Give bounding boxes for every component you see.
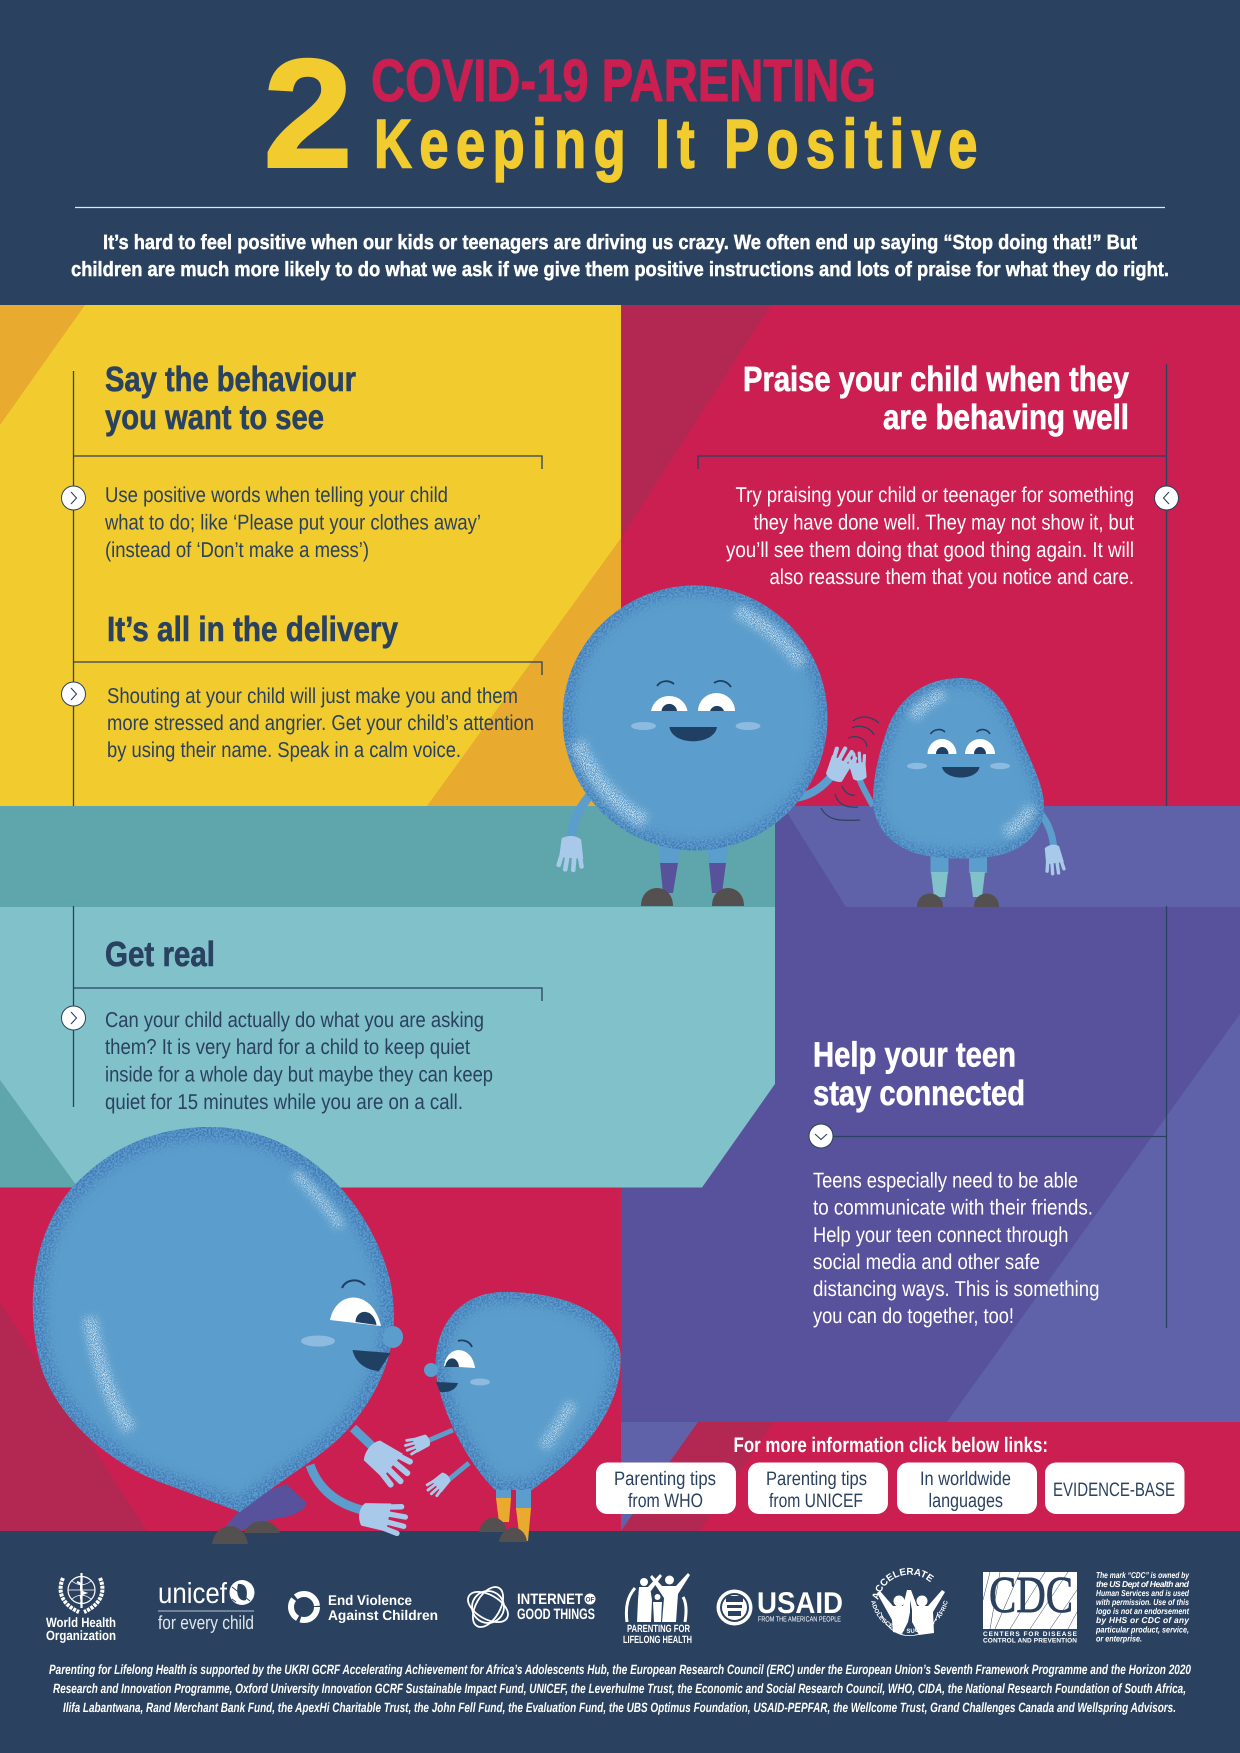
panel: all in the delivery: Shouting at your child will just make you and them bbox=[107, 684, 518, 708]
panel: help your teen bbox=[809, 906, 1166, 1328]
panel: praise your child: Praise your child when they bbox=[743, 360, 1129, 399]
panel: all in the delivery: It’s all in the delivery bbox=[107, 610, 398, 649]
icon: chevron right bbox=[62, 1006, 86, 1030]
CDC disclaimer bbox=[1095, 1570, 1190, 1644]
title: 2 bbox=[263, 27, 353, 200]
icon: chevron right bbox=[62, 682, 86, 706]
panel: say the behaviour: (instead of ‘Don’t make a mess’) bbox=[105, 538, 369, 562]
panel: say the behaviour: what to do; like ‘Please put your clothes away’ bbox=[104, 510, 481, 534]
panel: help your teen: to communicate with their friends. bbox=[813, 1196, 1093, 1220]
CDC disclaimer: with permission. Use of this bbox=[1096, 1597, 1189, 1607]
CDC disclaimer: the US Dept of Health and bbox=[1096, 1579, 1190, 1589]
panel: help your teen: you can do together, too! bbox=[813, 1304, 1014, 1328]
logo: CDC: CONTROL AND PREVENTION bbox=[983, 1638, 1077, 1644]
logo: Accelerate bbox=[871, 1568, 948, 1636]
logo: Parenting for Lifelong Health: PARENTING FOR bbox=[627, 1623, 690, 1635]
icon: chevron left bbox=[1154, 486, 1178, 510]
logo: Accelerate: ADOLESCENT • SUCCESS • AFRICA bbox=[871, 1600, 948, 1633]
panel: praise your child: Try praising your child or teenager for something bbox=[736, 483, 1134, 507]
illustration: big character high five bbox=[558, 586, 857, 906]
illustration: big character bending bbox=[33, 1127, 415, 1544]
panel: say the behaviour: Say the behaviour bbox=[105, 360, 356, 399]
button: WHO tips: from WHO bbox=[628, 1490, 703, 1512]
icon: chevron right bbox=[62, 486, 86, 510]
more information links bbox=[596, 1434, 1184, 1514]
logo: USAID bbox=[716, 1587, 843, 1626]
CDC disclaimer: The mark “CDC” is owned by bbox=[1096, 1570, 1190, 1580]
logo: Internet of Good Things: OF bbox=[586, 1596, 595, 1604]
panel: help your teen: stay connected bbox=[813, 1074, 1025, 1113]
logo: Parenting for Lifelong Health: LIFELONG HEALTH bbox=[623, 1634, 692, 1646]
panel: praise your child: also reassure them that you notice and care. bbox=[770, 565, 1134, 589]
CDC disclaimer: by HHS or CDC of any bbox=[1096, 1615, 1190, 1625]
panel: say the behaviour: you want to see bbox=[105, 398, 324, 437]
logo: CDC: CENTERS FOR DISEASE bbox=[983, 1631, 1078, 1638]
funding statement bbox=[49, 1662, 1191, 1715]
button: worldwide languages: languages bbox=[928, 1490, 1003, 1512]
logo: World Health Organization bbox=[46, 1573, 116, 1643]
CDC disclaimer: particular product, service, bbox=[1095, 1624, 1189, 1634]
logo: Parenting for Lifelong Health bbox=[623, 1573, 692, 1646]
logo: unicef bbox=[158, 1578, 254, 1634]
panel: get real: Get real bbox=[105, 935, 215, 974]
panel: get real: Can your child actually do what you are asking bbox=[105, 1008, 484, 1032]
panel: praise your child: you’ll see them doing that good thing again. It will bbox=[726, 538, 1134, 562]
button: UNICEF tips bbox=[748, 1462, 888, 1514]
panel: all in the delivery bbox=[62, 610, 542, 762]
panel: all in the delivery: by using their name. Speak in a calm voice. bbox=[107, 738, 461, 762]
CDC disclaimer: logo is not an endorsement bbox=[1096, 1606, 1190, 1616]
panel: get real bbox=[62, 906, 542, 1114]
panel: praise your child: they have done well. They may not show it, but bbox=[754, 510, 1134, 534]
panel: help your teen: distancing ways. This is something bbox=[813, 1277, 1100, 1301]
logo: World Health Organization: Organization bbox=[46, 1628, 116, 1643]
logo: Internet of Good Things: INTERNET bbox=[517, 1591, 583, 1608]
logo: CDC: CDC bbox=[989, 1567, 1073, 1624]
panel: help your teen: social media and other safe bbox=[813, 1250, 1040, 1274]
logo: Accelerate: ACCELERATE bbox=[872, 1568, 934, 1600]
icon: chevron down bbox=[809, 1124, 833, 1148]
button: WHO tips: Parenting tips bbox=[614, 1468, 716, 1490]
logo: USAID: USAID bbox=[757, 1587, 843, 1620]
more information links: For more information click below links: bbox=[734, 1434, 1048, 1457]
panel: say the behaviour bbox=[62, 360, 542, 806]
button: worldwide languages bbox=[897, 1462, 1037, 1514]
panel: help your teen: Teens especially need to be able bbox=[813, 1168, 1078, 1192]
CDC disclaimer: Human Services and is used bbox=[1096, 1588, 1190, 1598]
title bbox=[263, 27, 977, 200]
logo: Internet of Good Things bbox=[463, 1582, 596, 1632]
title: COVID-19 PARENTING bbox=[371, 47, 876, 114]
panel: get real: inside for a whole day but maybe they can keep bbox=[105, 1062, 493, 1086]
panel: get real: them? It is very hard for a child to keep quiet bbox=[105, 1035, 470, 1059]
intro text bbox=[71, 231, 1169, 281]
logo: End Violence Against Children: Against Children bbox=[328, 1607, 438, 1623]
illustration: small character bending bbox=[404, 1292, 621, 1542]
logo: unicef: for every child bbox=[158, 1613, 254, 1634]
panel: praise your child bbox=[698, 360, 1178, 806]
logo: End Violence Against Children bbox=[291, 1592, 438, 1623]
button: UNICEF tips: from UNICEF bbox=[769, 1490, 863, 1512]
logo: USAID: FROM THE AMERICAN PEOPLE bbox=[758, 1614, 841, 1624]
panel: all in the delivery: more stressed and angrier. Get your child’s attention bbox=[107, 711, 534, 735]
logo: CDC bbox=[983, 1567, 1078, 1644]
panel: get real: quiet for 15 minutes while you are on a call. bbox=[105, 1090, 463, 1114]
button: evidence base: EVIDENCE-BASE bbox=[1053, 1479, 1175, 1501]
panel: help your teen: Help your teen connect through bbox=[813, 1223, 1068, 1247]
CDC disclaimer: or enterprise. bbox=[1096, 1634, 1142, 1644]
panel: help your teen: Help your teen bbox=[813, 1036, 1016, 1074]
panel: praise your child: are behaving well bbox=[883, 398, 1129, 437]
logo: World Health Organization: World Health bbox=[46, 1615, 116, 1630]
button: WHO tips bbox=[596, 1462, 736, 1514]
button: evidence base bbox=[1045, 1462, 1184, 1514]
button: UNICEF tips: Parenting tips bbox=[766, 1468, 867, 1490]
motion lines around the high five bbox=[821, 717, 879, 820]
logo: Internet of Good Things: GOOD THINGS bbox=[517, 1606, 595, 1623]
intro text: It’s hard to feel positive when our kids or teenagers are driving us crazy. We often end up saying “Stop doing that!” But bbox=[103, 231, 1137, 254]
logo: End Violence Against Children: End Violence bbox=[328, 1592, 412, 1608]
illustration: small character high five bbox=[847, 678, 1065, 907]
button: worldwide languages: In worldwide bbox=[920, 1468, 1011, 1490]
panel: say the behaviour: Use positive words when telling your child bbox=[105, 483, 448, 507]
title: Keeping It Positive bbox=[374, 106, 977, 182]
logo: unicef: unicef bbox=[158, 1578, 228, 1610]
